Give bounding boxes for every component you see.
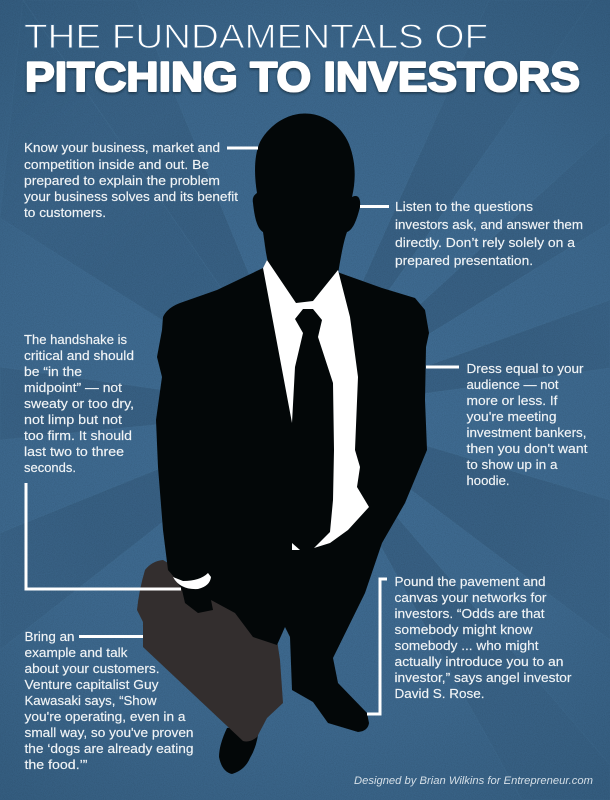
text block: dress equal to your audience: hoodie. <box>466 473 510 488</box>
text block: pound the pavement: investors. “Odds are that <box>394 606 545 621</box>
pointer line: ear to listening tip <box>360 205 389 208</box>
pointer line: briefcase to example tip <box>79 635 143 638</box>
title <box>24 18 580 100</box>
text block: bring an example: the food.’” <box>24 757 88 772</box>
text block: bring an example: Kawasaki says, “Show <box>24 693 157 708</box>
shirt cuff <box>173 573 211 589</box>
text block: know your business: to customers. <box>24 205 106 220</box>
text block: dress equal to your audience: more or less. If <box>466 393 558 408</box>
text block: listen to the questions: investors ask, and answer them <box>395 217 583 232</box>
text block: the handshake: too firm. It should <box>24 428 132 443</box>
text block: the handshake: not limp but not <box>24 412 122 427</box>
text block: bring an example <box>24 629 194 772</box>
icon: left shoe <box>219 725 259 774</box>
text block: the handshake: seconds. <box>24 460 76 475</box>
text block: the handshake: The handshake is <box>24 332 127 347</box>
text block: bring an example: Bring an <box>24 629 74 644</box>
title line 2: PITCHING TO INVESTORS <box>25 53 580 100</box>
text block: dress equal to your audience: audience — not <box>466 377 559 392</box>
title line 1: THE FUNDAMENTALS OF <box>24 18 488 56</box>
text block: dress equal to your audience: then you don't want <box>466 441 588 456</box>
text block: pound the pavement: canvas your networks for <box>394 590 547 605</box>
text block: the handshake: be “in the <box>24 364 82 379</box>
businessman silhouette illustration <box>137 114 429 774</box>
text block: know your business: your business solves and its benefit <box>24 189 238 204</box>
pointer line: suit to dress tip <box>426 366 459 368</box>
pointer line: hand to handshake tip <box>26 483 181 589</box>
text block: dress equal to your audience: you're meeting <box>466 409 556 424</box>
text block: the handshake: midpoint” — not <box>24 380 122 395</box>
head silhouette <box>253 114 360 303</box>
text block: bring an example: example and talk <box>24 645 128 660</box>
shirt tail <box>292 543 300 550</box>
text block: listen to the questions: prepared presentation. <box>395 253 533 268</box>
icon: briefcase <box>137 560 283 742</box>
text block: know your business: competition inside and out. Be <box>24 157 209 172</box>
text block: the handshake: critical and should <box>24 348 134 363</box>
text block: the handshake <box>24 332 134 475</box>
text block: bring an example: the ‘dogs are already eating <box>24 741 194 756</box>
text block: pound the pavement: David S. Rose. <box>394 686 484 701</box>
text block: know your business: prepared to explain the problem <box>24 173 220 188</box>
white shirt <box>263 260 369 548</box>
text block: pound the pavement: somebody might know <box>394 622 533 637</box>
text block: pound the pavement <box>394 574 572 701</box>
text block: pound the pavement: somebody ... who might <box>394 638 539 653</box>
text block: bring an example: about your customers. <box>24 661 160 676</box>
text block: bring an example: you're operating, even in a <box>24 709 186 724</box>
text block: pound the pavement: investor,” says angel investor <box>394 670 572 685</box>
text block: listen to the questions <box>395 199 583 268</box>
text block: bring an example: Venture capitalist Guy <box>24 677 159 692</box>
pointer line: head to business tip <box>227 146 258 150</box>
text block: the handshake: sweaty or too dry, <box>24 396 134 411</box>
text block: bring an example: small way, so you've proven <box>24 725 194 740</box>
text block: the handshake: last two to three <box>24 444 124 459</box>
text block: dress equal to your audience: investment bankers, <box>466 425 586 440</box>
pointer line: feet to networking tip <box>367 579 387 714</box>
body and suit silhouette <box>156 260 429 732</box>
text block: pound the pavement: actually introduce you to an <box>394 654 564 669</box>
text block: dress equal to your audience <box>466 361 588 488</box>
text block: listen to the questions: Listen to the questions <box>395 199 534 214</box>
text block: know your business: Know your business, market and <box>24 140 220 155</box>
text block: pound the pavement: Pound the pavement and <box>394 574 546 589</box>
text block: dress equal to your audience: Dress equal to your <box>466 361 584 376</box>
text block: dress equal to your audience: to show up in a <box>466 457 558 472</box>
text block: listen to the questions: directly. Don’t rely solely on a <box>395 235 576 250</box>
credit line: Designed by Brian Wilkins for Entrepreneur.com <box>354 775 593 787</box>
text block: know your business <box>24 140 238 220</box>
